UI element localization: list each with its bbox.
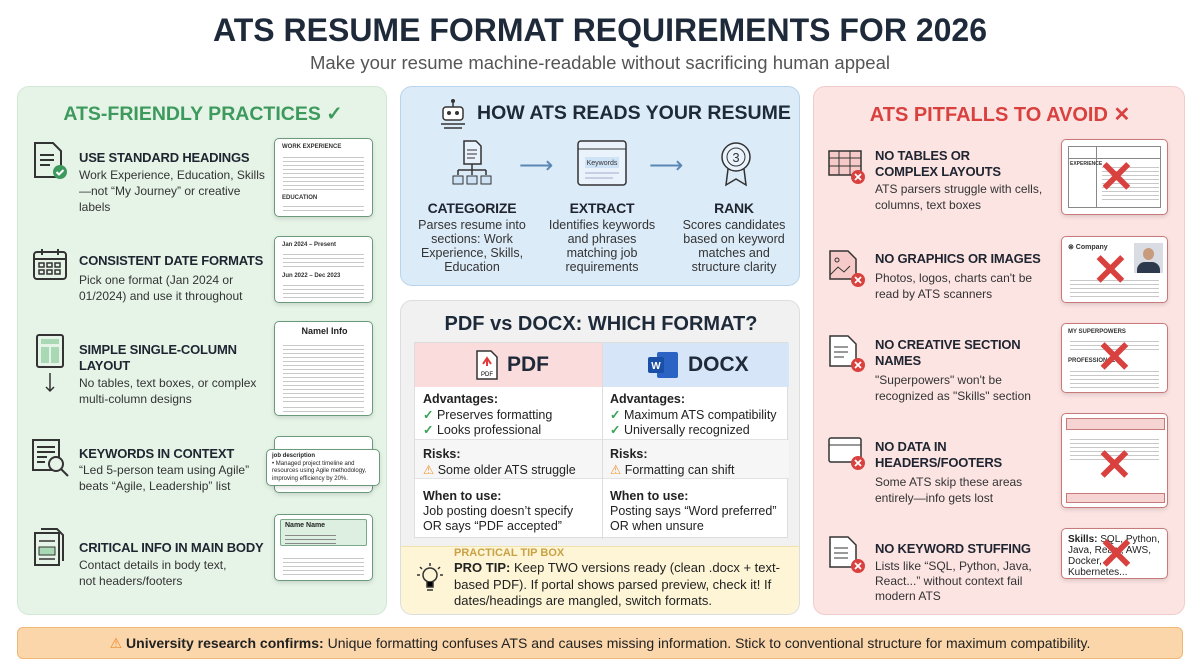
thumb: name name [274, 514, 373, 581]
thumb: table: EXPERIENCE [1070, 161, 1102, 167]
DOCX when to use: When to use: [610, 489, 688, 503]
column header: PDF [415, 343, 602, 387]
DOCX advantages: Advantages: [610, 392, 685, 406]
item: creative section names: "Superpowers" won't be recognized as "Skills" section [875, 373, 1031, 403]
column header: DOCX [602, 343, 789, 387]
column header: DOCX: W [651, 361, 661, 372]
icon: documents [34, 528, 64, 566]
step: rank [683, 142, 785, 274]
PDF advantages: ✓ Looks professional [423, 423, 541, 437]
item: critical info: not headers/footers [79, 574, 182, 588]
tip box: PRO TIP: Keep TWO versions ready (clean .docx + text-based PDF). If portal shows parsed preview, check it! If dates/headings are mangled, switch formats. [454, 560, 780, 608]
item: headers/footers: NO DATA IN [875, 439, 946, 454]
icon: magnifier document [32, 439, 69, 477]
item: no tables: NO TABLES OR [875, 148, 970, 163]
icon: rank badge: 3 [732, 150, 740, 165]
DOCX risks: ⚠ Formatting can shift [610, 462, 734, 476]
title: ATS RESUME FORMAT REQUIREMENTS FOR 2026 [213, 12, 987, 48]
tip box: PRACTICAL TIP BOX [454, 547, 564, 559]
item: keyword stuffing: NO KEYWORD STUFFING [875, 541, 1031, 556]
column header: PDF: PDF [481, 372, 493, 378]
item: single column: SIMPLE SINGLE-COLUMN [79, 342, 237, 357]
item: keywords in context: “Led 5-person team using Agile” beats “Agile, Leadership” list [79, 463, 249, 493]
step: categorize: Parses resume into sections: Work Experience, Skills, Education [418, 218, 526, 274]
item: no graphics: Photos, logos, charts can't be read by ATS scanners [875, 271, 1032, 301]
thumb: superpowers [1061, 323, 1168, 393]
subtitle: Make your resume machine-readable without sacrificing human appeal [310, 52, 890, 73]
tip box [401, 546, 801, 616]
thumb: photo: ✕ [1092, 246, 1129, 295]
step: extract: EXTRACT [570, 200, 634, 216]
item: keyword stuffing: Lists like “SQL, Python, Java, React...” without context fail modern ATS [875, 559, 1032, 603]
icon: robot [441, 99, 465, 129]
icon: categorize tree [452, 140, 492, 184]
thumb: name name: Name Name [285, 522, 325, 529]
item: critical info [79, 540, 264, 588]
DOCX advantages: ✓ Maximum ATS compatibility [610, 408, 777, 422]
item: no graphics [829, 250, 1041, 301]
item: standard headings: Work Experience, Education, Skills—not “My Journey” or creative labels [79, 168, 265, 214]
PDF risks: Risks: [423, 447, 461, 461]
heading: how ATS reads: HOW ATS READS YOUR RESUME [477, 102, 791, 124]
thumb: work experience [274, 138, 373, 217]
thumb: work experience: WORK EXPERIENCE [282, 144, 341, 150]
heading: ATS-friendly: ATS-FRIENDLY PRACTICES ✓ [63, 103, 343, 125]
step: rank: RANK [714, 200, 754, 216]
DOCX risks: Risks: [610, 447, 648, 461]
item: keyword stuffing [829, 536, 1032, 603]
panel: how ATS reads [400, 86, 800, 286]
DOCX when to use: Posting says “Word preferred” [610, 504, 776, 518]
PDF when to use: OR says “PDF accepted” [423, 519, 562, 533]
PDF when to use [423, 489, 574, 533]
item: headers/footers: Some ATS skip these areas entirely—info gets lost [875, 475, 1022, 505]
column header: DOCX: DOCX [688, 353, 749, 376]
comparison table [414, 342, 788, 538]
PDF advantages [423, 392, 552, 437]
PDF advantages: ✓ Preserves formatting [423, 408, 552, 422]
step: rank: Scores candidates based on keyword matches and structure clarity [683, 218, 785, 274]
panel: ATS pitfalls [813, 86, 1185, 615]
item: creative section names: NAMES [875, 353, 921, 368]
thumb: work experience: EDUCATION [282, 195, 317, 201]
item: headers/footers [828, 437, 1022, 505]
PDF advantages: Advantages: [423, 392, 498, 406]
thumb: table [1061, 139, 1168, 215]
item: no tables [828, 148, 1042, 212]
thumb: superpowers: PROFESSIONAL [1068, 358, 1115, 364]
PDF risks [423, 447, 576, 476]
DOCX when to use [610, 489, 776, 533]
icon: document check [34, 142, 67, 179]
DOCX advantages [610, 392, 777, 437]
DOCX advantages: ✓ Universally recognized [610, 423, 750, 437]
step: categorize: CATEGORIZE [428, 200, 516, 216]
item: no tables: ATS parsers struggle with cells, columns, text boxes [875, 182, 1042, 212]
icon: rank badge [721, 142, 751, 186]
DOCX when to use: OR when unsure [610, 519, 704, 533]
thumb: table: ✕ [1098, 153, 1135, 202]
item: critical info: CRITICAL INFO IN MAIN BODY [79, 540, 264, 555]
PDF when to use: Job posting doesn’t specify [423, 504, 573, 518]
item: keywords in context: KEYWORDS IN CONTEXT [79, 446, 234, 461]
item: single column [79, 342, 256, 406]
item: creative section names [829, 335, 1031, 403]
panel: ATS-friendly practices: job description [272, 453, 315, 459]
item: no graphics: NO GRAPHICS OR IMAGES [875, 251, 1041, 266]
item: date formats: CONSISTENT DATE FORMATS [79, 253, 263, 268]
item: standard headings: USE STANDARD HEADINGS [79, 150, 249, 165]
thumb: header footer [1061, 413, 1168, 508]
column header: PDF: PDF [507, 353, 549, 376]
thumb: dates: Jun 2022 – Dec 2023 [282, 273, 340, 279]
thumb: dates: Jan 2024 – Present [282, 242, 336, 248]
step: extract [549, 140, 655, 274]
panel: ATS-friendly practices: • Managed project timeline and resources using Agile methodology, improving efficiency by 20%. [272, 460, 366, 482]
item: keywords in context [79, 446, 249, 493]
step: extract: Identifies keywords and phrases matching job requirements [549, 218, 655, 274]
thumb: photo [1061, 236, 1168, 303]
thumb: header footer: ✕ [1096, 441, 1133, 490]
thumb: job description [274, 436, 373, 493]
thumb: skills stuffing: ✕ [1098, 530, 1135, 579]
item: single column: LAYOUT [79, 358, 130, 373]
DOCX risks [610, 447, 734, 476]
heading: PDF vs DOCX: PDF vs DOCX: WHICH FORMAT? [445, 313, 757, 335]
icon: keywords window [577, 140, 627, 186]
item: date formats: Pick one format (Jan 2024 or 01/2024) and use it throughout [79, 273, 242, 303]
item: date formats [79, 253, 263, 303]
arrow 2: ⟶ [649, 152, 683, 179]
bottom banner: ⚠ University research confirms: Unique formatting confuses ATS and causes missing information. Stick to conventional structure for maximum compatibility. [110, 635, 1090, 651]
panel: PDF vs DOCX [400, 300, 800, 615]
thumb: superpowers: ✕ [1096, 333, 1133, 382]
thumb: photo: ⊗ Company [1068, 244, 1108, 251]
item: single column: No tables, text boxes, or complex multi-column designs [79, 376, 256, 406]
item: headers/footers: HEADERS/FOOTERS [875, 455, 1002, 470]
thumb: name info [274, 321, 373, 416]
thumb: name info: Namel Info [301, 326, 348, 336]
item: no tables: COMPLEX LAYOUTS [875, 164, 1001, 179]
step: categorize [418, 140, 526, 274]
item: creative section names: NO CREATIVE SECTION [875, 337, 1020, 352]
arrow 1: ⟶ [519, 152, 553, 179]
icon: lightbulb [417, 563, 443, 591]
thumb: dates [274, 236, 373, 303]
PDF when to use: When to use: [423, 489, 501, 503]
item: critical info: Contact details in body text, [79, 558, 226, 572]
bottom banner [17, 627, 1183, 659]
icon: single column [36, 334, 64, 392]
thumb: superpowers: MY SUPERPOWERS [1068, 329, 1126, 335]
PDF risks: ⚠ Some older ATS struggle [423, 462, 576, 476]
icon: keywords window: Keywords [587, 160, 618, 167]
thumb: skills stuffing: Skills: SQL, Python, Java, React, AWS, Docker, Kubernetes... [1068, 534, 1160, 578]
icon: calendar [33, 249, 67, 280]
panel: ATS-friendly practices [17, 86, 387, 615]
heading: pitfalls: ATS PITFALLS TO AVOID ✕ [870, 104, 1130, 126]
